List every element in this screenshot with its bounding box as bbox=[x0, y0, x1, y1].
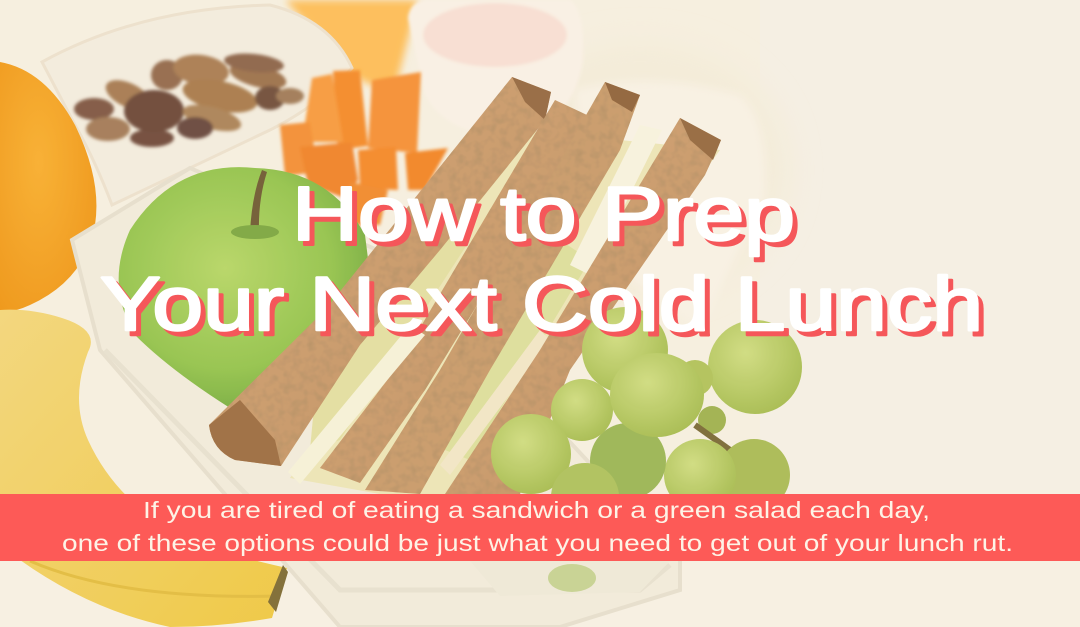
rear container bbox=[575, 81, 766, 330]
subtitle text: one of these options could be just what you need to get out of your lunch rut. bbox=[62, 530, 1013, 556]
almonds and nuts bbox=[74, 51, 304, 147]
subtitle text: If you are tired of eating a sandwich or a green salad each day, bbox=[143, 497, 930, 523]
almond box bbox=[42, 5, 352, 205]
sandwich bbox=[209, 77, 721, 494]
bread slice 2 bbox=[320, 100, 587, 483]
bread slice 4 bbox=[445, 118, 721, 494]
title line 2: Your Next Cold Lunch: Your Next Cold Lunch bbox=[105, 267, 988, 352]
carrots bbox=[280, 70, 448, 225]
main lunch box bbox=[72, 168, 680, 627]
bread slice 1 bbox=[209, 77, 551, 466]
subtitle text bbox=[62, 497, 1013, 556]
title line 1: How to Prep: How to Prep bbox=[292, 172, 795, 257]
bread slice 3 bbox=[365, 82, 640, 494]
juice glass bbox=[285, 0, 418, 90]
yogurt cup bbox=[408, 0, 583, 136]
title line 2: Your Next Cold Lunch: Your Next Cold Lunch bbox=[100, 262, 983, 347]
white cheese edges bbox=[288, 325, 425, 484]
title line 1: How to Prep: How to Prep bbox=[297, 177, 800, 262]
orange bbox=[0, 62, 96, 313]
sandwich filling bbox=[290, 130, 720, 494]
apple bbox=[119, 167, 372, 408]
banana bbox=[0, 310, 288, 627]
grapes bbox=[491, 307, 802, 531]
